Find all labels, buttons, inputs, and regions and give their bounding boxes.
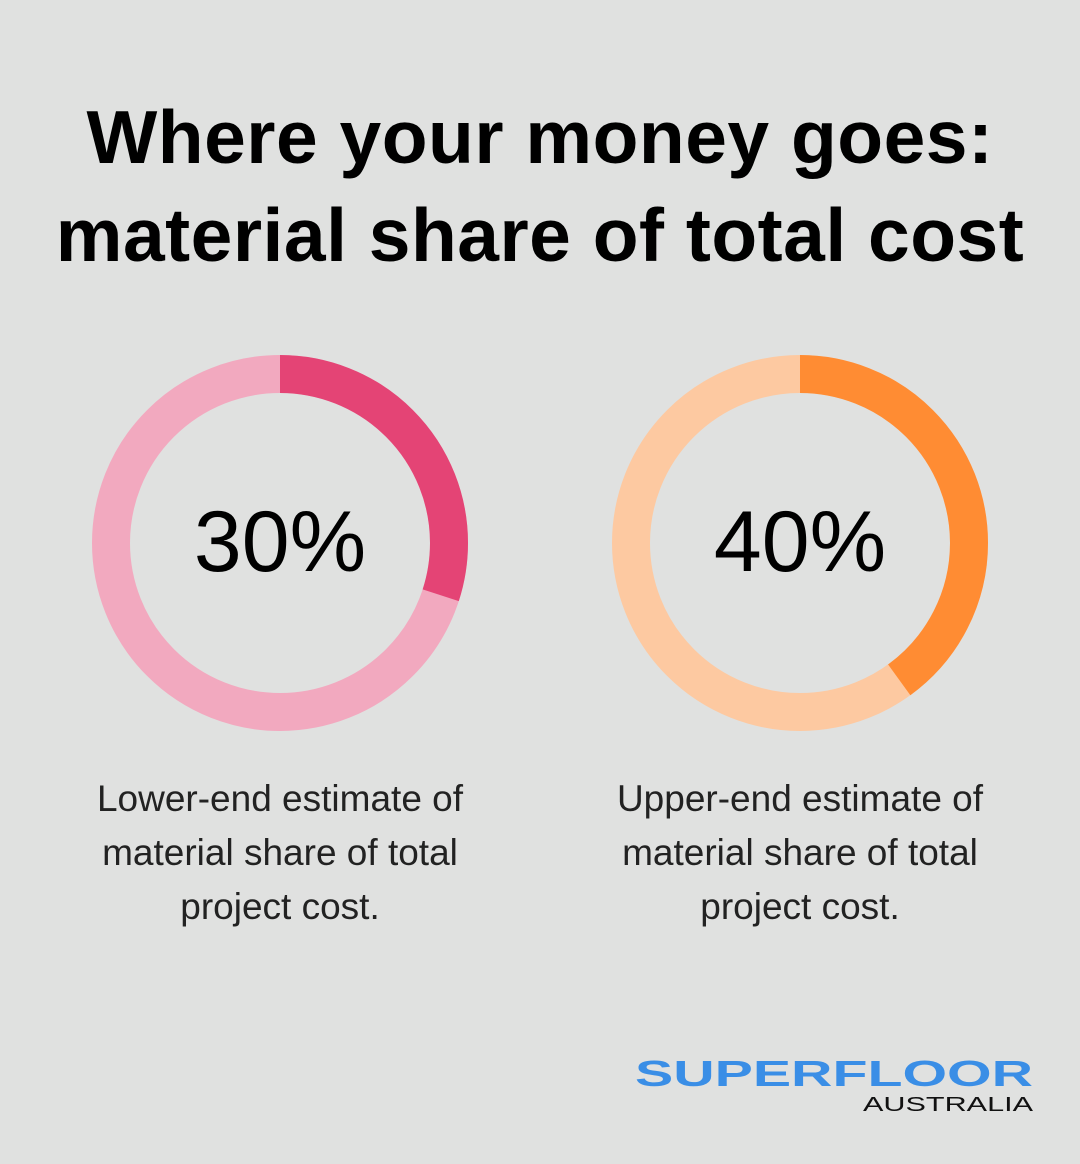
chart: donut 40% xyxy=(612,355,988,731)
chart: donut 30%: 30% xyxy=(194,494,366,590)
logo: SUPERFLOOR xyxy=(635,1053,1033,1094)
logo xyxy=(635,1053,1034,1116)
logo: AUSTRALIA xyxy=(863,1094,1034,1116)
text: upper-end description: Upper-end estimate of material share of total project cost. xyxy=(617,778,983,927)
chart: donut 40%: 40% xyxy=(714,494,886,590)
title: Where your money goes: xyxy=(86,95,994,179)
text: lower-end description: Lower-end estimate of material share of total project cost. xyxy=(97,778,463,927)
title: material share of total cost xyxy=(56,193,1024,277)
title xyxy=(56,95,1024,277)
chart: donut 30% xyxy=(92,355,468,731)
